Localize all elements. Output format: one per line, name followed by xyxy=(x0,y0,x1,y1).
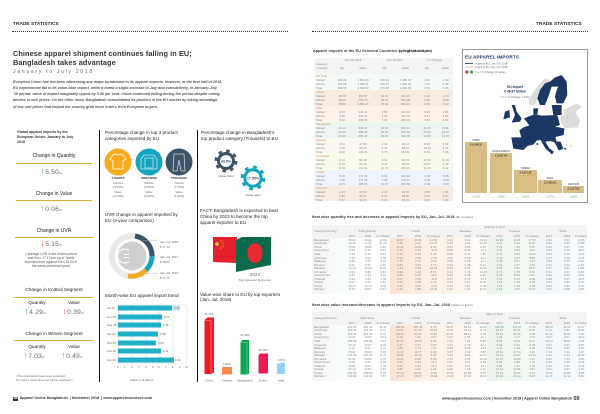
right table title: Apparel imports of the EU Selected Countries (by length/value/unit price) xyxy=(313,49,431,53)
bar chart: Jun-18 xyxy=(107,315,116,319)
gear caption 1: Value rises xyxy=(218,174,234,178)
UVR note: ( Average UVR in the review period xyxy=(25,252,77,256)
country import bars xyxy=(465,142,584,193)
panel: UVR donut: Jan.-Jul. 2016 xyxy=(160,270,178,274)
EU map and bars: -5.17% xyxy=(472,196,481,198)
bar chart: 1 xyxy=(124,365,126,369)
3D bar chart xyxy=(204,312,285,382)
left footer: Apparel Online Bangladesh | November 2018 | www.apparelresources.com xyxy=(20,396,152,400)
footnote: for in EU's union-time and further analysed ) xyxy=(16,378,72,382)
panel: value share chart xyxy=(200,292,285,382)
bar chart: 6 xyxy=(158,365,160,369)
bar labels: € 8,687.54 xyxy=(495,154,508,158)
title: Chinese apparel shipment continues falling in EU; xyxy=(13,49,192,58)
bar chart: 7.78 xyxy=(174,306,180,310)
trousers stats: (1.61%) xyxy=(174,194,184,198)
EU map and bars: 3.64% xyxy=(522,196,530,198)
heading xyxy=(105,130,178,141)
heading: knitted segment: Change in Knitted Segment xyxy=(25,286,83,292)
t-shirt stats: (-0.14%) xyxy=(112,194,124,198)
map of Europe xyxy=(503,75,582,154)
bar chart: Jan-18 xyxy=(107,358,116,362)
table section tints xyxy=(314,58,453,74)
bar chart: Mar-18 xyxy=(107,341,116,345)
UVR note: was Euro 17.13 per kg of Textile xyxy=(28,256,74,260)
bar labels: € 4,971.53 xyxy=(520,172,532,174)
bar chart: 0 xyxy=(117,365,119,369)
icon: China and Bangladesh flags xyxy=(213,237,271,272)
heading: EU (3-year comparison) xyxy=(105,218,154,223)
intro paragraph: of low unit prices that helped the country grab more orders from European buyers. xyxy=(13,105,158,109)
panel: EU apparel imports map xyxy=(462,49,588,203)
intro paragraph xyxy=(13,80,222,109)
fact text: apparel exporter to EU xyxy=(200,220,246,225)
table: apparel imports by country xyxy=(314,58,453,201)
heading: top product category (Trousers) to EU xyxy=(201,136,278,141)
panel: global imports summary: ↑4.29% xyxy=(24,306,46,316)
stat: quantity: ↑5.50% xyxy=(40,166,62,176)
right footer: www.apparelresources.com | November 2018 | Apparel Online Bangladesh 59 xyxy=(442,396,579,402)
heading: Value-wise share to EU by top exporters xyxy=(200,292,280,296)
donut labels: Jan.-Jul. 2018 xyxy=(160,240,178,244)
trousers stats: Value xyxy=(175,190,183,194)
sweater stats xyxy=(141,176,157,198)
t-shirt stats: T-SHIRTS xyxy=(111,176,125,180)
bar labels xyxy=(470,139,580,190)
3D bar chart: 5.80% xyxy=(223,362,231,366)
heading xyxy=(105,212,178,223)
icon: t-shirt xyxy=(104,148,132,176)
map legend: Import to EU, Jan.-Jul. 2018 xyxy=(475,62,508,66)
intro paragraph: European Union has not been witnessing any major turnaround in its apparel imports. However, in the first half of 2018, xyxy=(13,80,222,84)
knitted value: Value xyxy=(68,300,80,304)
3D bar chart: India xyxy=(278,378,284,382)
donut labels xyxy=(160,240,178,249)
bar chart: 2 xyxy=(131,365,133,369)
3D bar chart: 38.70% xyxy=(204,312,214,316)
heading xyxy=(200,292,280,302)
heading: change in value: Change in Value xyxy=(36,190,72,196)
heading: Percentage change in Bangladesh's xyxy=(201,130,274,135)
bar chart xyxy=(107,304,189,369)
footnote xyxy=(16,374,72,382)
knitted quantity: Quantity xyxy=(28,300,46,304)
icon: gear value 1 xyxy=(214,150,238,172)
panel: product categories xyxy=(104,130,192,198)
woven value: Value xyxy=(68,344,80,348)
intro paragraph: EU experienced fall in its value-wise import, while it noted a slight increase in July and cumulatively, in January-July xyxy=(13,86,217,90)
bar chart: 5.60 xyxy=(158,341,164,345)
bar chart: Jul-18 xyxy=(107,306,115,310)
3D bar chart: 4.67% xyxy=(277,358,285,362)
EU map and bars: -2.07% xyxy=(546,196,555,198)
EU map and bars: 6.88% xyxy=(570,196,578,198)
UVR note: imported from against Euro 18.04 in xyxy=(25,260,77,264)
panel: Bangladesh top category xyxy=(201,130,278,196)
column tints xyxy=(312,312,587,325)
bar labels: € 9,148.32 xyxy=(470,144,483,146)
t-shirt stats: Value xyxy=(114,190,122,194)
bar chart: Apr-18 xyxy=(107,332,116,336)
panel intro: European Union: January to July xyxy=(17,135,73,139)
stat: UVR: ↓5.15% xyxy=(40,238,62,248)
bar chart: 5 xyxy=(152,365,154,369)
date subtitle: January to July 2018 xyxy=(13,68,94,74)
EU map and bars xyxy=(465,54,584,198)
heading: Month-wise EU apparel import trend xyxy=(105,292,179,298)
panel intro xyxy=(17,130,74,144)
panel: UVR donut: € 18.04 xyxy=(160,260,170,264)
trousers stats: TROUSERS xyxy=(171,176,187,180)
sweater stats: (0.64%) xyxy=(144,194,154,198)
axis caption: (Value in $ billion) xyxy=(130,378,154,382)
table: item-wise quantity xyxy=(312,225,587,294)
bar chart: 5.88 xyxy=(160,332,166,336)
heading: Percentage change in top 3 product xyxy=(105,130,178,135)
map title: EU APPAREL IMPORTS xyxy=(465,54,519,60)
heading: change in quantity: Change in Quantity xyxy=(33,152,75,158)
map total callout: Y-o-Y % Change: 1.10% xyxy=(501,95,530,99)
map legend: Y-o-Y % Change (in value) xyxy=(475,70,506,74)
bar labels: TURKEY xyxy=(520,167,531,170)
panel intro: Global apparel imports by the xyxy=(17,130,68,134)
t-shirt stats: Volume xyxy=(113,181,123,185)
intro paragraph: decline in unit prices. On the other hand, Bangladesh consolidated its position in the EU market by taking advantage xyxy=(13,98,218,102)
icon: gear value 1: 43.8% xyxy=(221,159,232,163)
panel: global imports summary: ↑7.03% xyxy=(23,350,45,360)
map total callout: EU import xyxy=(507,85,524,89)
sweater stats: (4.64%) xyxy=(144,185,154,189)
bar labels: BANGLADESH xyxy=(492,150,510,153)
bar chart: 6.38 xyxy=(163,323,169,327)
map legend xyxy=(465,62,508,74)
panel: UVR donut xyxy=(105,212,178,280)
bar chart: 6.31 xyxy=(163,349,169,353)
trousers stats xyxy=(171,176,187,198)
flag caption: 2023 xyxy=(250,272,260,277)
map total callout xyxy=(501,85,530,99)
bar chart: 8.34 xyxy=(175,358,181,362)
icon: gear value 2: 17.50% xyxy=(247,176,260,180)
bar labels: € 2,480.01 xyxy=(544,182,557,184)
bar labels: INDIA xyxy=(547,177,554,180)
panel: UVR donut: Jan.-Jul. 2017 xyxy=(160,255,178,259)
footnote: ( The information have been extracted xyxy=(16,374,65,378)
bar chart: 6.50 xyxy=(164,315,170,319)
bar chart: 7 xyxy=(165,365,167,369)
bar chart: 10 xyxy=(185,365,189,369)
left footer: 58 xyxy=(14,396,18,400)
bar chart: 3 xyxy=(138,365,140,369)
bar chart: Feb-18 xyxy=(107,349,116,353)
column divider lines xyxy=(99,130,100,382)
donut labels: € 17.13 xyxy=(160,245,170,249)
bar chart: 8 xyxy=(172,365,174,369)
UVR note xyxy=(24,252,77,268)
trousers stats: (7.14%) xyxy=(174,185,184,189)
sweater stats: Volume xyxy=(144,181,154,185)
title xyxy=(13,49,192,67)
bar labels: VIETNAM xyxy=(568,183,579,186)
3D bar chart: Bangladesh xyxy=(238,378,253,382)
panel: global imports summary: ↓0.39% xyxy=(62,306,84,316)
3D bar chart: Turkey xyxy=(259,378,268,382)
donut chart xyxy=(109,233,158,279)
fact text: China by 2023 to become the top xyxy=(200,214,268,219)
stat: value: ↑0.06% xyxy=(40,202,62,212)
heading: change in UVR: Change in UVR xyxy=(37,228,71,234)
heading: (Jan.-Jul. 2018) xyxy=(200,297,231,302)
bar labels: CHINA xyxy=(472,139,480,142)
map legend: Import to EU, Jan.-Jul. 2018 xyxy=(475,65,508,69)
EU map and bars: 5.88% xyxy=(497,196,505,198)
flag caption: Top Apparel Exporter xyxy=(239,278,271,282)
heading xyxy=(201,130,278,141)
t-shirt stats xyxy=(111,176,125,198)
map total callout: € 46.87 billion xyxy=(504,90,526,94)
gear caption 2: Value rises xyxy=(245,192,261,196)
right page header: TRADE STATISTICS xyxy=(536,21,582,26)
icon: trousers xyxy=(166,148,192,176)
flag caption xyxy=(238,272,272,282)
woven quantity: Quantity xyxy=(28,344,46,348)
panel: global imports summary xyxy=(14,130,93,382)
column tints xyxy=(312,225,587,238)
fact text xyxy=(200,208,278,225)
intro paragraph: '18 period, value of import marginally upped by 0.06 per cent. China continued falling during the period despite noting xyxy=(13,92,220,96)
icon: gear value 2 xyxy=(240,166,266,190)
title: Bangladesh takes advantage xyxy=(13,58,116,67)
table: item-wise value xyxy=(312,312,587,381)
panel intro: 2018 xyxy=(17,140,25,144)
bar labels: € 1,317.81 xyxy=(568,188,580,190)
fact text: FACT: Bangladesh is expected to beat xyxy=(200,208,278,212)
panel: UVR donut: € 17.76 xyxy=(160,276,170,280)
panel: month-wise trend xyxy=(105,292,189,382)
trousers stats: Volume xyxy=(174,181,184,185)
left page header: TRADE STATISTICS xyxy=(13,21,59,26)
heading: categories imported by EU xyxy=(105,136,159,141)
3D bar chart: China xyxy=(205,378,213,382)
heading: woven segment: Change in Woven Segment xyxy=(25,330,83,336)
bar chart: 4 xyxy=(145,365,147,369)
bar chart: May-18 xyxy=(107,323,117,327)
UVR note: the same period last year) xyxy=(32,264,70,268)
sweater stats: SWEATERS xyxy=(141,176,157,180)
bar chart: 9 xyxy=(179,365,181,369)
icon: sweater xyxy=(136,148,162,176)
sweater stats: Value xyxy=(145,190,153,194)
3D bar chart: 14.03% xyxy=(258,348,268,352)
3D bar chart: Vietnam xyxy=(222,378,233,382)
quantity table title: Item wise quantity rise and decrease in apparel imports by EU, Jan.-Jul. 2018 (By country) xyxy=(312,215,473,219)
value table title: Item wise value increase/decrease in apparel imports by EU, Jan.-Jul. 2018 (Value in Euro) xyxy=(312,303,473,307)
panel: global imports summary: ↑0.49% xyxy=(61,350,83,360)
3D bar chart: 20.48% xyxy=(240,333,250,337)
heading: UVR change in apparel imported by xyxy=(105,212,178,216)
t-shirt stats: (-5.64%) xyxy=(112,185,124,189)
